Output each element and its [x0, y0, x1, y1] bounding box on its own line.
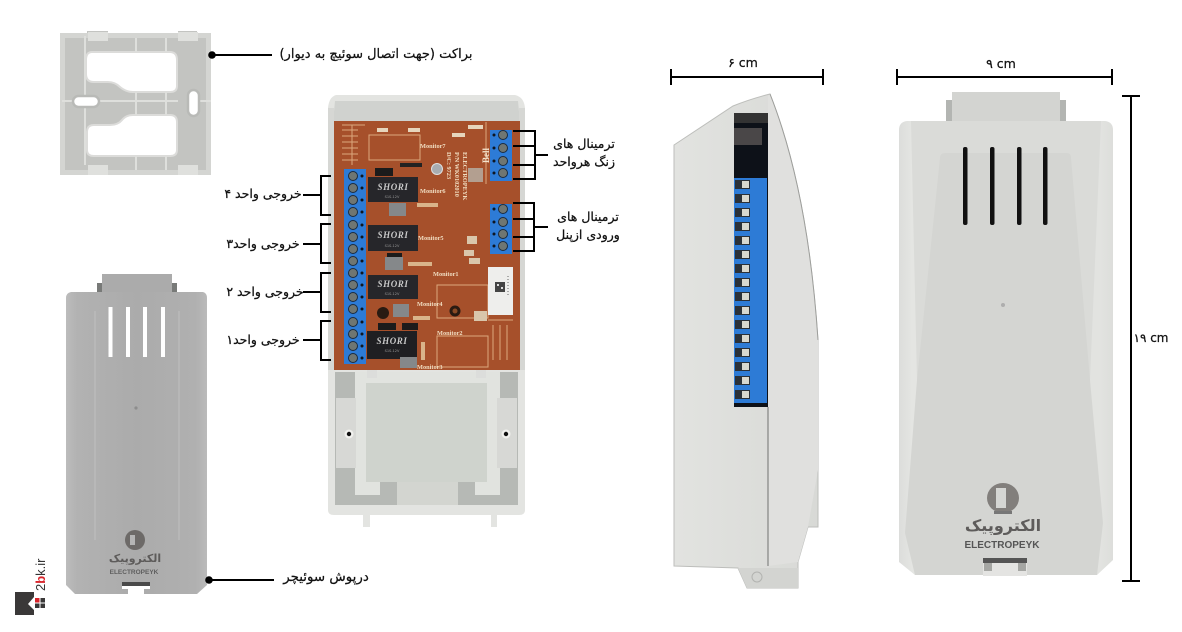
dimension: 19 cm	[1122, 96, 1168, 581]
side view	[674, 94, 818, 588]
lower compartment	[335, 366, 518, 505]
pcb: D/C: 9723	[445, 152, 452, 179]
pcb: Monitor2	[437, 330, 463, 337]
callout: panel input terminals: ترمینال های	[557, 209, 619, 225]
callout: output unit 2	[226, 273, 331, 312]
rear front view with logo	[899, 92, 1113, 576]
watermark: 2bk.ir	[33, 558, 48, 591]
pcb: Monitor6	[420, 188, 446, 195]
callout: output unit 1	[226, 321, 331, 360]
dimension: 6 cm	[671, 55, 823, 85]
relay 4: SHORI	[376, 336, 408, 346]
callout: panel input terminals	[513, 203, 620, 251]
relay 3: S1S-12V	[385, 292, 400, 296]
relay 2: S1S-12V	[385, 244, 400, 248]
left terminal block	[344, 169, 366, 364]
callout: bell terminals: زنگ هرواحد	[553, 154, 615, 170]
relay 4: S1S-12V	[385, 349, 400, 353]
front cover with logo	[66, 274, 207, 594]
relay 1: SHORI	[377, 182, 409, 192]
pcb: Monitor5	[418, 235, 444, 242]
callout: output unit 4: خروجی واحد ۴	[224, 186, 302, 202]
relay 4	[367, 331, 417, 359]
wall bracket	[60, 31, 211, 175]
open enclosure	[328, 95, 525, 527]
dimension: 9 cm	[897, 56, 1112, 85]
callout: panel input terminals: ورودی ازپنل	[556, 227, 620, 243]
relay 1	[368, 177, 418, 202]
vent slots	[108, 307, 165, 357]
callout: output unit 3: خروجی واحد۳	[226, 236, 300, 252]
side terminal slot	[734, 113, 768, 407]
relay 3: SHORI	[377, 279, 409, 289]
label sticker	[488, 267, 513, 315]
logo: ELECTROPEYK	[110, 569, 159, 576]
callout: output unit 3	[226, 224, 331, 263]
pcb	[334, 121, 520, 371]
pcb: Monitor7	[420, 143, 446, 150]
logo: الکتروپیک	[965, 516, 1041, 536]
cover callout	[205, 570, 369, 585]
relay 1: S1S-12V	[385, 195, 400, 199]
cover callout: درپوش سوئیچر	[282, 570, 369, 585]
logo	[109, 530, 161, 576]
pcb: Monitor3	[417, 364, 443, 371]
relay 2	[368, 225, 418, 251]
bracket callout: براکت (جهت اتصال سوئیچ به دیوار)	[279, 47, 473, 62]
logo: ELECTROPEYK	[964, 540, 1040, 551]
pcb: Monitor1	[433, 271, 459, 278]
pcb: P/N WK0102010	[453, 152, 460, 197]
dimension: 19 cm: ۱۹ cm	[1134, 331, 1168, 345]
relay 3	[368, 275, 418, 299]
logo: الکتروپیک	[109, 552, 161, 565]
bell terminal block	[490, 130, 512, 181]
dimension: 9 cm: ۹ cm	[986, 56, 1016, 71]
callout: bell terminals: ترمینال های	[553, 136, 615, 152]
pcb: Monitor4	[417, 301, 443, 308]
relay 2: SHORI	[377, 230, 409, 240]
pcb: ELECTROPEYK	[461, 152, 468, 200]
dimension: 6 cm: ۶ cm	[728, 55, 758, 70]
callout: output unit 2: خروجی واحد ۲	[226, 284, 304, 300]
panel input terminal block	[490, 204, 512, 254]
pcb markings: Bell	[481, 148, 491, 163]
vent slots	[963, 147, 1048, 225]
callout: bell terminals	[513, 131, 615, 179]
callout: output unit 4	[224, 176, 331, 215]
callout: output unit 1: خروجی واحد۱	[226, 332, 300, 348]
logo	[964, 483, 1041, 551]
watermark	[15, 558, 48, 615]
